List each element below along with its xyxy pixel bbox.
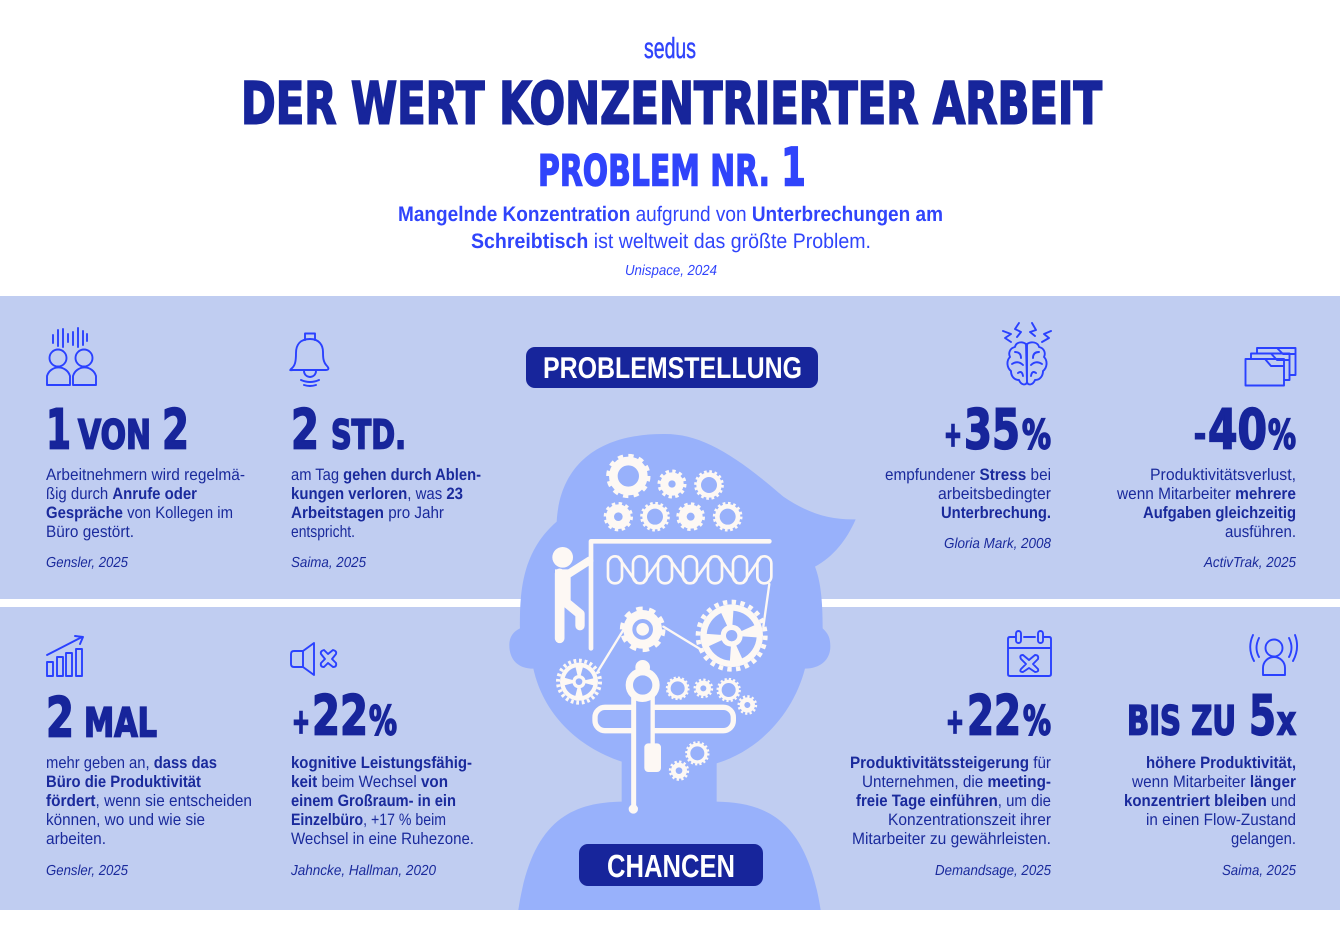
stat: 2 Mal [46, 686, 157, 750]
stat: 2 Mal: 2 [46, 686, 74, 750]
text: fördert, wenn sie entscheiden [46, 792, 252, 810]
logo: sedus: sedus [644, 33, 696, 65]
subtitle: problem nr. 1: 1 [781, 138, 806, 198]
stat: 1 von 2 [46, 398, 189, 462]
icon: two people with noise [47, 328, 96, 385]
icon: stressed brain [1003, 323, 1051, 384]
text: empfundener Stress bei [885, 466, 1051, 484]
stat: -40%: 40 [1208, 398, 1267, 462]
text: Aufgaben gleichzeitig [1143, 504, 1296, 522]
text [291, 754, 474, 848]
intro text [398, 203, 943, 253]
text [885, 466, 1051, 522]
text: Einzelbüro, +17 % beim [291, 811, 446, 829]
text [1124, 754, 1297, 848]
text: Unternehmen, die meeting- [862, 773, 1051, 791]
text: Arbeitnehmern wird regelmä- [46, 466, 245, 484]
stat: +35%: % [1022, 412, 1051, 458]
stat: +35%: 35 [964, 398, 1020, 462]
central illustration: head with machinery [509, 434, 856, 910]
text: arbeiten. [46, 830, 106, 848]
stat: +22%: % [1023, 698, 1051, 744]
lever with slot [595, 660, 733, 814]
text: Büro die Produktivität [46, 773, 201, 791]
big gear [698, 602, 765, 669]
stat: 2 Std. [291, 398, 406, 462]
icon: crossed calendar [1008, 631, 1051, 676]
stat: bis zu 5x [1127, 684, 1296, 748]
source: Gloria Mark, 2008 [944, 536, 1051, 552]
text: Arbeitstagen pro Jahr [291, 504, 444, 522]
text: wenn Mitarbeiter länger [1131, 773, 1297, 791]
stat: +35%: + [944, 415, 962, 455]
source: Gensler, 2025 [46, 863, 129, 879]
text: arbeitsbedingter [938, 485, 1051, 503]
text: kognitive Leistungsfähig- [291, 754, 472, 772]
text [291, 466, 481, 541]
icon: folders [1246, 348, 1296, 386]
text: mehr geben an, dass das [46, 754, 217, 772]
text: ßig durch Anrufe oder [46, 485, 198, 503]
stat: 1 von 2: 2 [162, 398, 189, 462]
stat: 1 von 2: 1 [46, 398, 71, 462]
icon: bell [290, 334, 328, 386]
stat: 2 Std.: STD. [331, 412, 406, 458]
panel: +22% meeting-free [850, 631, 1052, 879]
stat: 2 Mal: MAL [84, 700, 157, 746]
gears lower cluster [667, 678, 756, 780]
panel: 2 Mal [46, 636, 252, 879]
text: höhere Produktivität, [1146, 754, 1296, 772]
source: ActivTrak, 2025 [1203, 555, 1297, 571]
stat: bis zu 5x: x [1277, 698, 1296, 744]
panel: 1 von 2 [46, 328, 245, 571]
text: Gespräche von Kollegen im [46, 504, 233, 522]
icon: muted speaker [291, 643, 336, 675]
source: Gensler, 2025 [46, 555, 129, 571]
head silhouette [509, 434, 856, 910]
text: am Tag gehen durch Ablen- [291, 466, 481, 484]
text: Produktivitätssteigerung für [850, 754, 1051, 772]
source: Saima, 2025 [1222, 863, 1297, 879]
stat: +22%: + [946, 702, 964, 742]
stat: +22%: 22 [967, 684, 1021, 748]
text: Wechsel in eine Ruhezone. [291, 830, 474, 848]
small spoked gear [558, 661, 600, 703]
badge: Problemstellung: PROBLEMSTELLUNG [543, 352, 802, 385]
subtitle: problem nr. 1 [538, 138, 806, 198]
text: Produktivitätsverlust, [1150, 466, 1296, 484]
intro text: Schreibtisch ist weltweit das größte Problem. [471, 230, 871, 253]
text: ausführen. [1225, 523, 1296, 541]
stat: +22%: 22 [312, 684, 368, 748]
stat: bis zu 5x: BIS ZU [1127, 698, 1236, 744]
climbing figure [552, 547, 589, 638]
panel: -40% [1116, 348, 1297, 571]
panel: background problem band [0, 296, 1340, 599]
panel: +35% [885, 323, 1051, 552]
text: konzentriert bleiben und [1124, 792, 1296, 810]
intro text: Mangelnde Konzentration aufgrund von Unterbrechungen am [398, 203, 943, 226]
stat: +22%: % [369, 698, 397, 744]
text: Mitarbeiter zu gewährleisten. [852, 830, 1051, 848]
text: entspricht. [291, 523, 355, 541]
icon: rising bar chart [47, 636, 83, 676]
badge: Chancen: CHANCEN [607, 848, 735, 884]
text: wenn Mitarbeiter mehrere [1116, 485, 1296, 503]
text: Unterbrechung. [941, 504, 1051, 522]
source: Jahncke, Hallman, 2020 [290, 863, 436, 879]
text [46, 466, 245, 541]
text [850, 754, 1051, 848]
subtitle: problem nr. 1: PROBLEM NR. [538, 146, 770, 196]
stat: bis zu 5x: 5 [1249, 684, 1276, 748]
stat: +22%: + [292, 702, 310, 742]
badge: Problemstellung [526, 347, 818, 388]
stat: -40%: % [1268, 412, 1296, 458]
stat: -40%: - [1194, 415, 1206, 455]
panel: bis zu 5x [1124, 635, 1297, 879]
text: Konzentrationszeit ihrer [888, 811, 1051, 829]
middle gear [622, 609, 663, 650]
header block [241, 33, 1102, 279]
text: freie Tage einführen, um die [856, 792, 1051, 810]
text: gelangen. [1231, 830, 1296, 848]
text: einem Großraum- in ein [291, 792, 456, 810]
source: Saima, 2025 [291, 555, 367, 571]
text: in einen Flow-Zustand [1146, 811, 1296, 829]
text [1116, 466, 1296, 541]
panel: 2 Std. [290, 334, 481, 571]
source: Unispace: Unispace, 2024 [625, 263, 717, 279]
stat: 1 von 2: VON [78, 412, 151, 458]
text: können, wo und wie sie [46, 811, 205, 829]
text: Büro gestört. [46, 523, 134, 541]
frame and spring [591, 541, 771, 671]
text: keit beim Wechsel von [291, 773, 448, 791]
text [46, 754, 252, 848]
source: Demandsage, 2025 [935, 863, 1052, 879]
stat: 2 Std.: 2 [291, 398, 319, 462]
gears top cluster [605, 456, 741, 530]
panel: +22% quiet [290, 643, 474, 879]
text: kungen verloren, was 23 [291, 485, 463, 503]
panel: background opportunities band [0, 607, 1340, 910]
icon: person with focus waves [1250, 635, 1297, 675]
